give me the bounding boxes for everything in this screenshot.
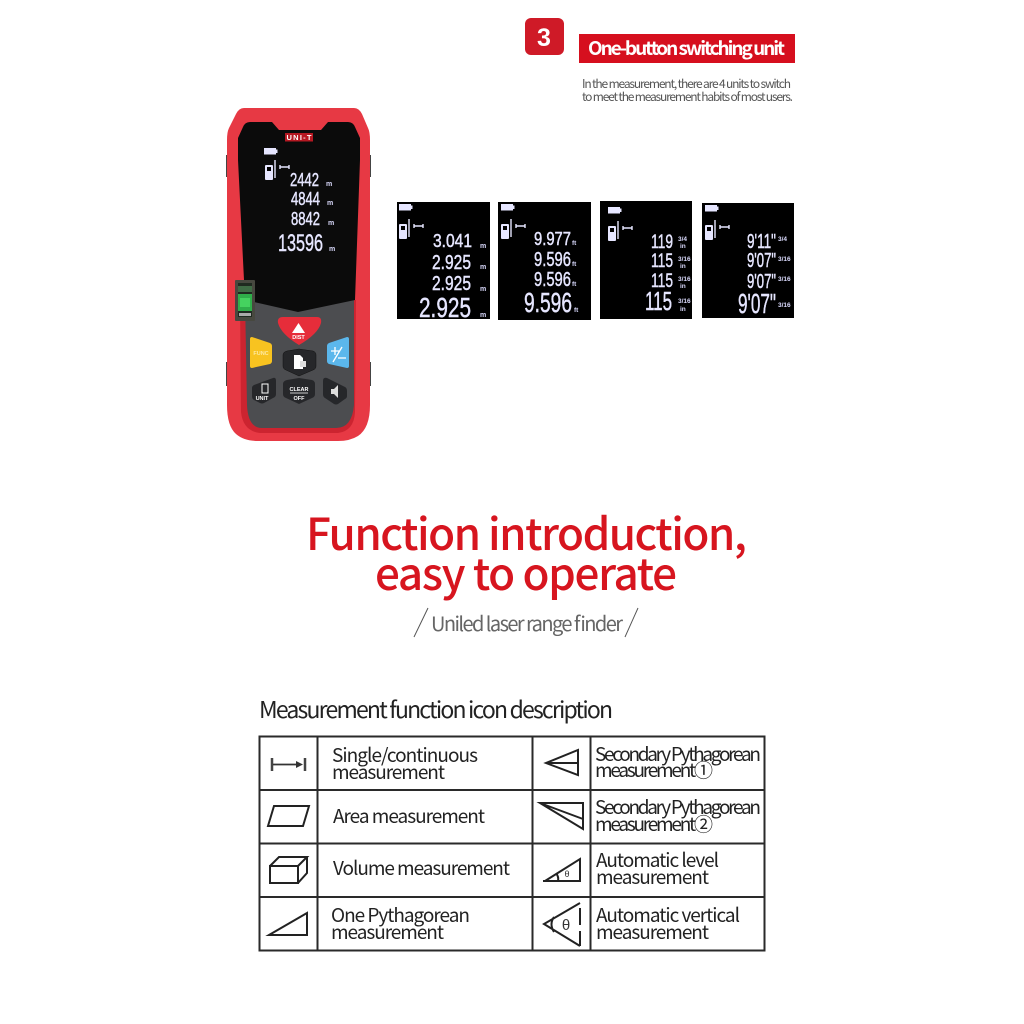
LCD screen: feet xyxy=(498,202,591,320)
FUNC button: FUNC xyxy=(253,351,269,357)
row: secondary Pythagorean 2: Secondary Pythagorean xyxy=(595,793,761,820)
row: secondary Pythagorean 1 xyxy=(546,740,761,783)
LCD screen: feet and inches: 3/16 xyxy=(778,302,791,309)
step number badge: 3 xyxy=(537,24,551,52)
LCD screen: feet and inches: 9'07" xyxy=(738,288,776,319)
UNI-T logo: UNI-T xyxy=(286,133,312,142)
row: automatic vertical measurement: measurement xyxy=(596,918,709,945)
subtitle with slashes: Uniled laser range finder xyxy=(431,608,623,637)
LCD screen: metres: m xyxy=(480,264,486,271)
LCD screen: feet: ft xyxy=(574,307,579,314)
DIST button xyxy=(278,317,321,345)
section heading: one-button switching unit: One-button switching unit xyxy=(588,34,785,61)
laser range finder device xyxy=(226,108,371,441)
device screen readings: m xyxy=(327,200,333,207)
LCD screen: feet and inches: 3/16 xyxy=(778,256,791,263)
table grid xyxy=(260,736,764,950)
device screen readings: 2442 xyxy=(290,170,319,190)
side grips xyxy=(226,155,371,386)
UNIT button: UNIT xyxy=(256,396,269,402)
row: automatic level measurement: measurement xyxy=(596,863,709,890)
device screen readings: m xyxy=(329,246,335,253)
bubble level xyxy=(235,280,255,321)
LCD screen: feet and inches: 9'07" xyxy=(747,271,776,293)
UNIT button xyxy=(252,378,276,404)
display xyxy=(238,122,360,312)
FUNC button xyxy=(250,337,272,368)
row: one Pythagorean measurement: One Pythagorean xyxy=(331,901,470,928)
LCD screen: metres: 3.041 xyxy=(433,231,472,251)
main title xyxy=(306,499,747,603)
LCD screen: feet: ft xyxy=(572,281,577,288)
LCD screen: inches: in xyxy=(680,263,686,270)
LCD screen: metres: m xyxy=(480,243,486,250)
LCD screen: feet: 9.596 xyxy=(524,287,572,318)
LCD screen: feet: 9.596 xyxy=(534,269,571,291)
LCD screen: inches: 119 xyxy=(651,232,673,253)
LCD screen: feet: ft xyxy=(572,240,577,247)
main title: Function introduction, xyxy=(306,499,747,563)
memory button xyxy=(283,349,316,376)
LCD screen: inches: 115 xyxy=(645,286,672,316)
row: automatic vertical measurement: Automatic vertical xyxy=(596,901,740,928)
device screen readings xyxy=(264,148,335,257)
row: volume measurement: Volume measurement xyxy=(333,854,510,881)
LCD screen: metres: 2.925 xyxy=(432,273,471,295)
plus minus button xyxy=(327,337,349,368)
row: automatic vertical measurement xyxy=(544,901,740,946)
LCD screen: feet: ft xyxy=(572,261,577,268)
LCD screen: feet: 9.977 xyxy=(534,229,571,249)
LCD screen: inches: in xyxy=(680,306,686,313)
row: volume measurement xyxy=(270,854,510,883)
LCD screen: inches: 3/16 xyxy=(678,298,691,305)
LCD screen: feet and inches: 3/16 xyxy=(778,276,791,283)
row: area measurement: Area measurement xyxy=(333,802,485,829)
device screen readings: 4844 xyxy=(291,189,320,209)
row: automatic level measurement xyxy=(543,846,719,890)
CLEAR OFF button: OFF xyxy=(294,396,305,402)
table heading: Measurement function icon description xyxy=(259,691,613,725)
LCD screen: metres xyxy=(397,202,490,323)
device screen readings: 8842 xyxy=(291,209,320,229)
mute button xyxy=(323,378,347,404)
device screen readings: 13596 xyxy=(278,230,323,257)
LCD screen: feet and inches: 9'11" xyxy=(747,231,776,253)
LCD screen: metres: m xyxy=(480,286,486,293)
CLEAR OFF button: CLEAR xyxy=(290,387,308,393)
LCD screen: metres: 2.925 xyxy=(419,292,471,323)
row: secondary Pythagorean 1: measurement① xyxy=(595,756,713,783)
section description: In the measurement, there are 4 units to switch xyxy=(582,75,791,92)
device screen readings: m xyxy=(326,181,332,188)
section description xyxy=(582,75,793,105)
row: secondary Pythagorean 1: Secondary Pythagorean xyxy=(595,740,761,767)
LCD screen: inches: 3/16 xyxy=(678,256,691,263)
section description: to meet the measurement habits of most users. xyxy=(582,88,793,105)
row: automatic level measurement: θ xyxy=(564,869,570,879)
LCD screen: feet and inches: 3/4 xyxy=(778,236,787,243)
CLEAR OFF button xyxy=(283,378,315,404)
row: one Pythagorean measurement xyxy=(269,901,470,945)
row: one Pythagorean measurement: measurement xyxy=(331,918,444,945)
LCD screen: inches: in xyxy=(680,243,686,250)
LCD screen: inches: in xyxy=(680,283,686,290)
row: secondary Pythagorean 2 xyxy=(540,793,761,837)
row: secondary Pythagorean 2: measurement② xyxy=(595,810,713,837)
LCD screen: inches: 115 xyxy=(651,251,673,272)
row: automatic level measurement: Automatic level xyxy=(596,846,719,873)
row: automatic vertical measurement: θ xyxy=(562,917,570,934)
LCD screen: feet and inches xyxy=(702,203,794,319)
step number badge xyxy=(525,18,564,55)
LCD screen: inches: 3/4 xyxy=(678,236,687,243)
LCD screen: inches xyxy=(600,201,692,319)
device screen readings: m xyxy=(328,220,334,227)
LCD screen: metres: m xyxy=(480,312,486,319)
LCD screen: inches: 3/16 xyxy=(678,276,691,283)
row: single or continuous measurement: Single/continuous xyxy=(332,741,478,768)
DIST button: DIST xyxy=(292,335,305,341)
LCD screen: metres: 2.925 xyxy=(432,252,471,274)
row: single or continuous measurement: measurement xyxy=(332,758,445,785)
device body xyxy=(227,108,370,441)
keypad panel xyxy=(245,298,354,428)
LCD screen: feet and inches: 9'07" xyxy=(747,250,776,272)
icon description table xyxy=(260,736,764,950)
LCD screen: feet: 9.596 xyxy=(534,249,571,271)
row: single or continuous measurement xyxy=(272,741,478,785)
main title: easy to operate xyxy=(375,539,677,603)
LCD screen: inches: 115 xyxy=(651,271,673,292)
